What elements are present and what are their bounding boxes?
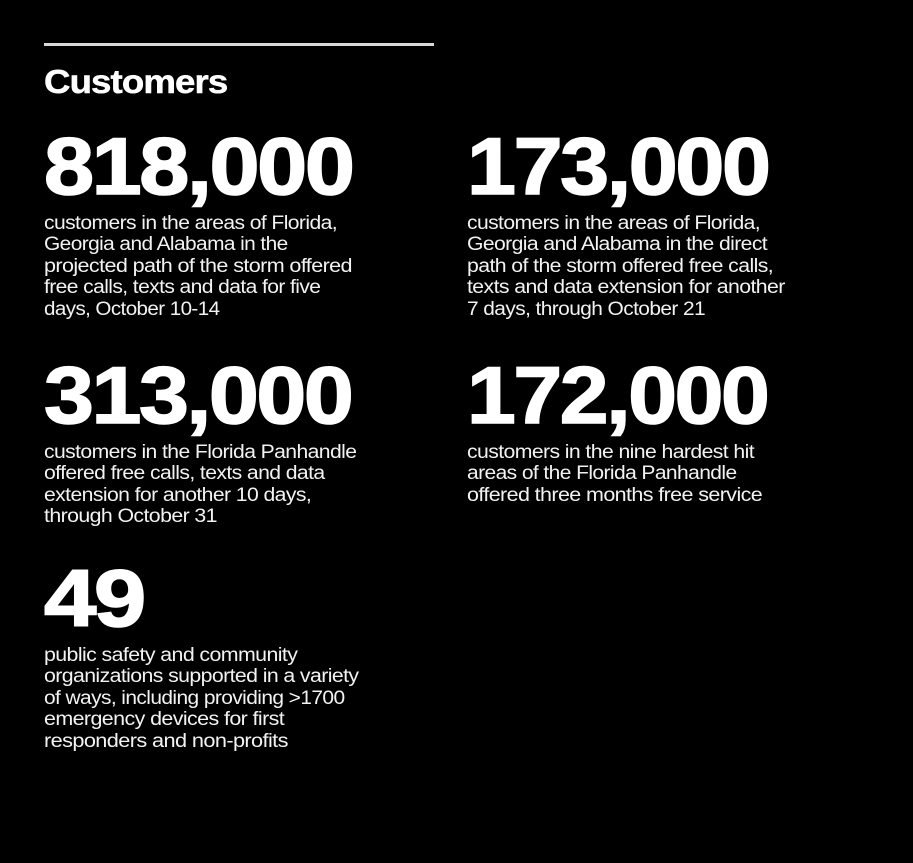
description <box>467 441 762 506</box>
description: path of the storm offered free calls, <box>467 255 773 277</box>
description: extension for another 10 days, <box>44 484 311 506</box>
description <box>467 212 785 320</box>
description: Georgia and Alabama in the <box>44 233 288 255</box>
description: projected path of the storm offered <box>44 255 352 277</box>
description: through October 31 <box>44 505 217 527</box>
description: emergency devices for first <box>44 708 284 730</box>
description <box>44 212 352 320</box>
number: 172,000 <box>467 351 767 441</box>
description: customers in the Florida Panhandle <box>44 441 356 463</box>
stat: 313,000 <box>44 351 356 527</box>
description: Georgia and Alabama in the direct <box>467 233 767 255</box>
description: customers in the areas of Florida, <box>467 212 760 234</box>
stat: 49 <box>44 554 359 752</box>
stat: 173,000 <box>467 122 785 320</box>
number: 313,000 <box>44 351 351 441</box>
description: 7 days, through October 21 <box>467 298 705 320</box>
header rule <box>44 43 434 46</box>
heading: Customers <box>44 63 227 100</box>
description: responders and non-profits <box>44 730 288 752</box>
description: customers in the nine hardest hit <box>467 441 754 463</box>
description: texts and data extension for another <box>467 276 785 298</box>
description <box>44 441 356 527</box>
description: free calls, texts and data for five <box>44 276 320 298</box>
stat: 172,000 <box>467 351 768 506</box>
description: public safety and community <box>44 644 297 666</box>
description: customers in the areas of Florida, <box>44 212 337 234</box>
number: 818,000 <box>44 122 352 212</box>
stat: 818,000 <box>44 122 352 320</box>
number: 49 <box>44 554 144 644</box>
number: 173,000 <box>467 122 769 212</box>
description: organizations supported in a variety <box>44 665 358 687</box>
description <box>44 644 359 752</box>
description: of ways, including providing >1700 <box>44 687 345 709</box>
description: areas of the Florida Panhandle <box>467 462 737 484</box>
description: offered three months free service <box>467 484 762 506</box>
description: days, October 10-14 <box>44 298 219 320</box>
description: offered free calls, texts and data <box>44 462 325 484</box>
